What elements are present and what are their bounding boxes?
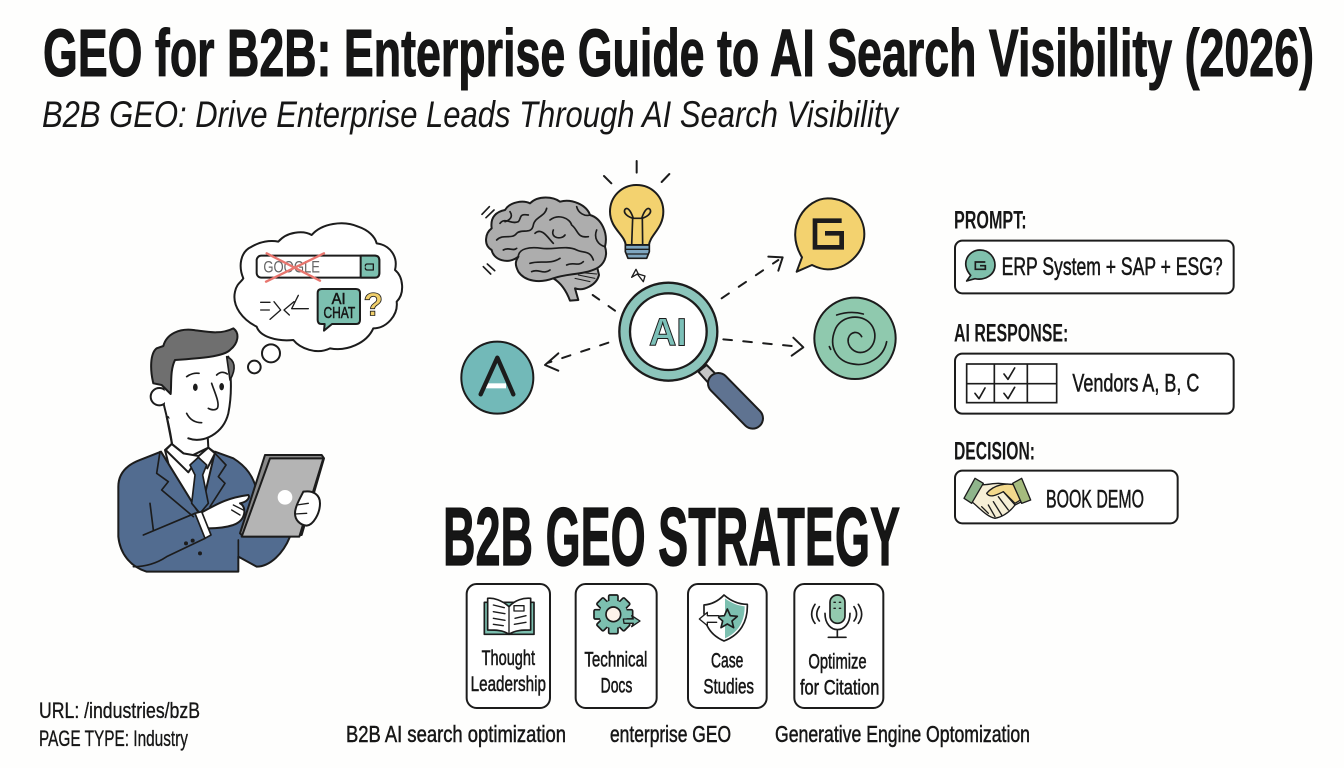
AI chat bubble: AI xyxy=(332,291,346,308)
card: thought leadership: Thought xyxy=(482,646,535,670)
heading: B2B GEO strategy: B2B GEO STRATEGY xyxy=(443,490,900,583)
panel: prompt to decision flow xyxy=(954,206,1234,523)
neck xyxy=(167,417,208,457)
man: body and suit xyxy=(118,417,290,572)
question mark: ? xyxy=(364,286,383,322)
card: technical docs: Technical xyxy=(584,648,647,672)
card: case studies xyxy=(688,584,767,708)
heading: decision: DECISION: xyxy=(954,437,1035,465)
thought cloud xyxy=(234,223,402,373)
keyword: enterprise GEO: enterprise GEO xyxy=(610,721,731,747)
man: head xyxy=(151,328,237,444)
scribbled arrows xyxy=(261,295,308,319)
heading: prompt: PROMPT: xyxy=(954,206,1027,234)
hands xyxy=(133,491,320,567)
dashed arrows from magnifier xyxy=(545,257,803,371)
crossed-out search bar: GOOGLE xyxy=(263,257,320,276)
card: case studies: Case xyxy=(711,649,743,673)
heading: AI response: AI RESPONSE: xyxy=(954,320,1068,348)
card: optimize for citation: for Citation xyxy=(800,675,879,699)
page metadata: PAGE TYPE: Industry xyxy=(39,726,188,751)
AI chat bubble: CHAT xyxy=(323,305,356,322)
strategy cards xyxy=(467,584,883,708)
card: thought leadership: Leadership xyxy=(471,672,546,696)
illustration: businessman with tablet and thought cloud xyxy=(118,223,402,572)
icon: AI magnifying glass xyxy=(619,283,753,418)
AI chat bubble xyxy=(318,289,360,331)
response box xyxy=(955,354,1234,414)
keyword: B2B AI search optimization: B2B AI search optimization xyxy=(346,721,566,747)
decision box: BOOK DEMO xyxy=(1046,485,1144,513)
keyword: generative engine optomization: Generative Engine Optomization xyxy=(775,721,1030,747)
icon: open book xyxy=(484,598,534,634)
icon: gear xyxy=(594,595,640,634)
icon: light bulb xyxy=(604,161,669,282)
crossed-out search bar xyxy=(257,253,379,282)
decision box xyxy=(955,471,1178,523)
page metadata: URL: /industries/bzB xyxy=(39,698,200,723)
icon: microphone xyxy=(812,595,862,637)
tablet xyxy=(240,455,324,537)
icon: handshake xyxy=(964,478,1031,518)
icon: G speech bubble xyxy=(795,198,864,272)
prompt box xyxy=(955,241,1234,293)
response box: Vendors A, B, C xyxy=(1072,370,1199,398)
icon: spiral circle xyxy=(814,298,896,379)
prompt box: ERP System + SAP + ESG? xyxy=(1002,253,1223,281)
page metadata xyxy=(39,698,200,751)
card: optimize for citation: Optimize xyxy=(808,649,867,673)
card: case studies: Studies xyxy=(703,674,754,698)
AI search diagram xyxy=(461,161,896,418)
card: thought leadership xyxy=(467,584,550,708)
icon: shield with star xyxy=(699,595,747,641)
icon: AI magnifying glass: AI xyxy=(649,312,687,355)
icon: A circle xyxy=(461,342,533,414)
icon: brain xyxy=(482,197,606,301)
card: technical docs xyxy=(576,584,657,708)
card: technical docs: Docs xyxy=(601,673,632,697)
subtitle: B2B GEO: Drive Enterprise Leads Through AI Search Visibility xyxy=(42,94,900,135)
card: optimize for citation xyxy=(794,584,883,708)
